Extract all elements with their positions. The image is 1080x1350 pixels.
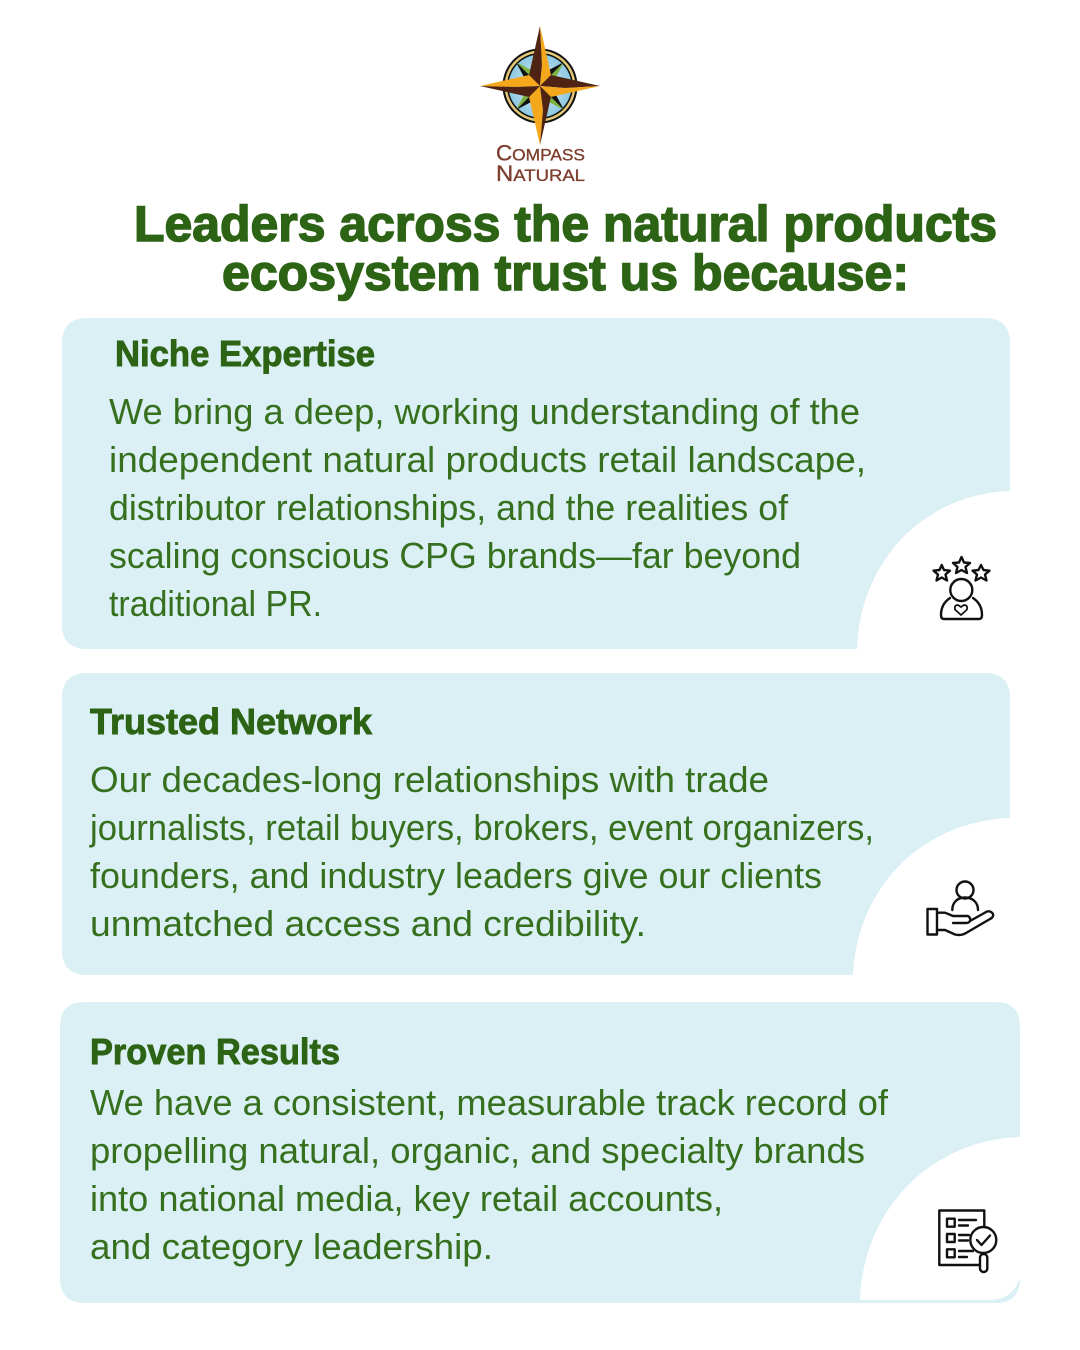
icon: hand holding person xyxy=(928,882,993,935)
body text: and category leadership. xyxy=(90,1226,493,1267)
body text: We have a consistent, measurable track record of xyxy=(90,1082,889,1123)
body text: propelling natural, organic, and specialty brands xyxy=(90,1130,865,1171)
title: ecosystem trust us because: xyxy=(222,245,909,301)
heading: Proven Results xyxy=(90,1031,340,1072)
body text: journalists, retail buyers, brokers, event organizers, xyxy=(89,807,874,848)
body text: scaling conscious CPG brands—far beyond xyxy=(109,535,801,576)
panel: Proven Results xyxy=(60,1002,1020,1303)
icon: person with stars and heart xyxy=(934,557,990,619)
logo wordmark xyxy=(496,140,585,186)
body text: founders, and industry leaders give our clients xyxy=(90,855,822,896)
icon: compass rose xyxy=(480,26,600,145)
panel background xyxy=(62,318,1010,649)
body text xyxy=(90,1082,889,1267)
logo wordmark: COMPASS xyxy=(496,140,585,166)
body text: unmatched access and credibility. xyxy=(90,903,646,944)
white corner cutout xyxy=(860,1137,1020,1300)
logo: Compass Natural xyxy=(480,26,600,186)
body text xyxy=(89,759,874,944)
heading: Niche Expertise xyxy=(115,333,375,374)
panel: Trusted Network xyxy=(62,673,1010,975)
title xyxy=(134,196,997,301)
panel background xyxy=(60,1002,1020,1303)
panel: Niche Expertise xyxy=(62,318,1010,649)
body text: traditional PR. xyxy=(109,583,322,624)
body text: distributor relationships, and the realities of xyxy=(109,487,789,528)
body text: Our decades-long relationships with trade xyxy=(90,759,769,800)
icon: checklist with magnifier xyxy=(939,1210,996,1272)
heading: Trusted Network xyxy=(90,701,373,742)
body text: We bring a deep, working understanding of the xyxy=(109,391,860,432)
title: Leaders across the natural products xyxy=(134,196,997,252)
logo wordmark: NATURAL xyxy=(496,161,585,186)
body text: into national media, key retail accounts, xyxy=(90,1178,723,1219)
body text: independent natural products retail landscape, xyxy=(109,439,866,480)
panel background xyxy=(62,673,1010,975)
body text xyxy=(109,391,866,624)
